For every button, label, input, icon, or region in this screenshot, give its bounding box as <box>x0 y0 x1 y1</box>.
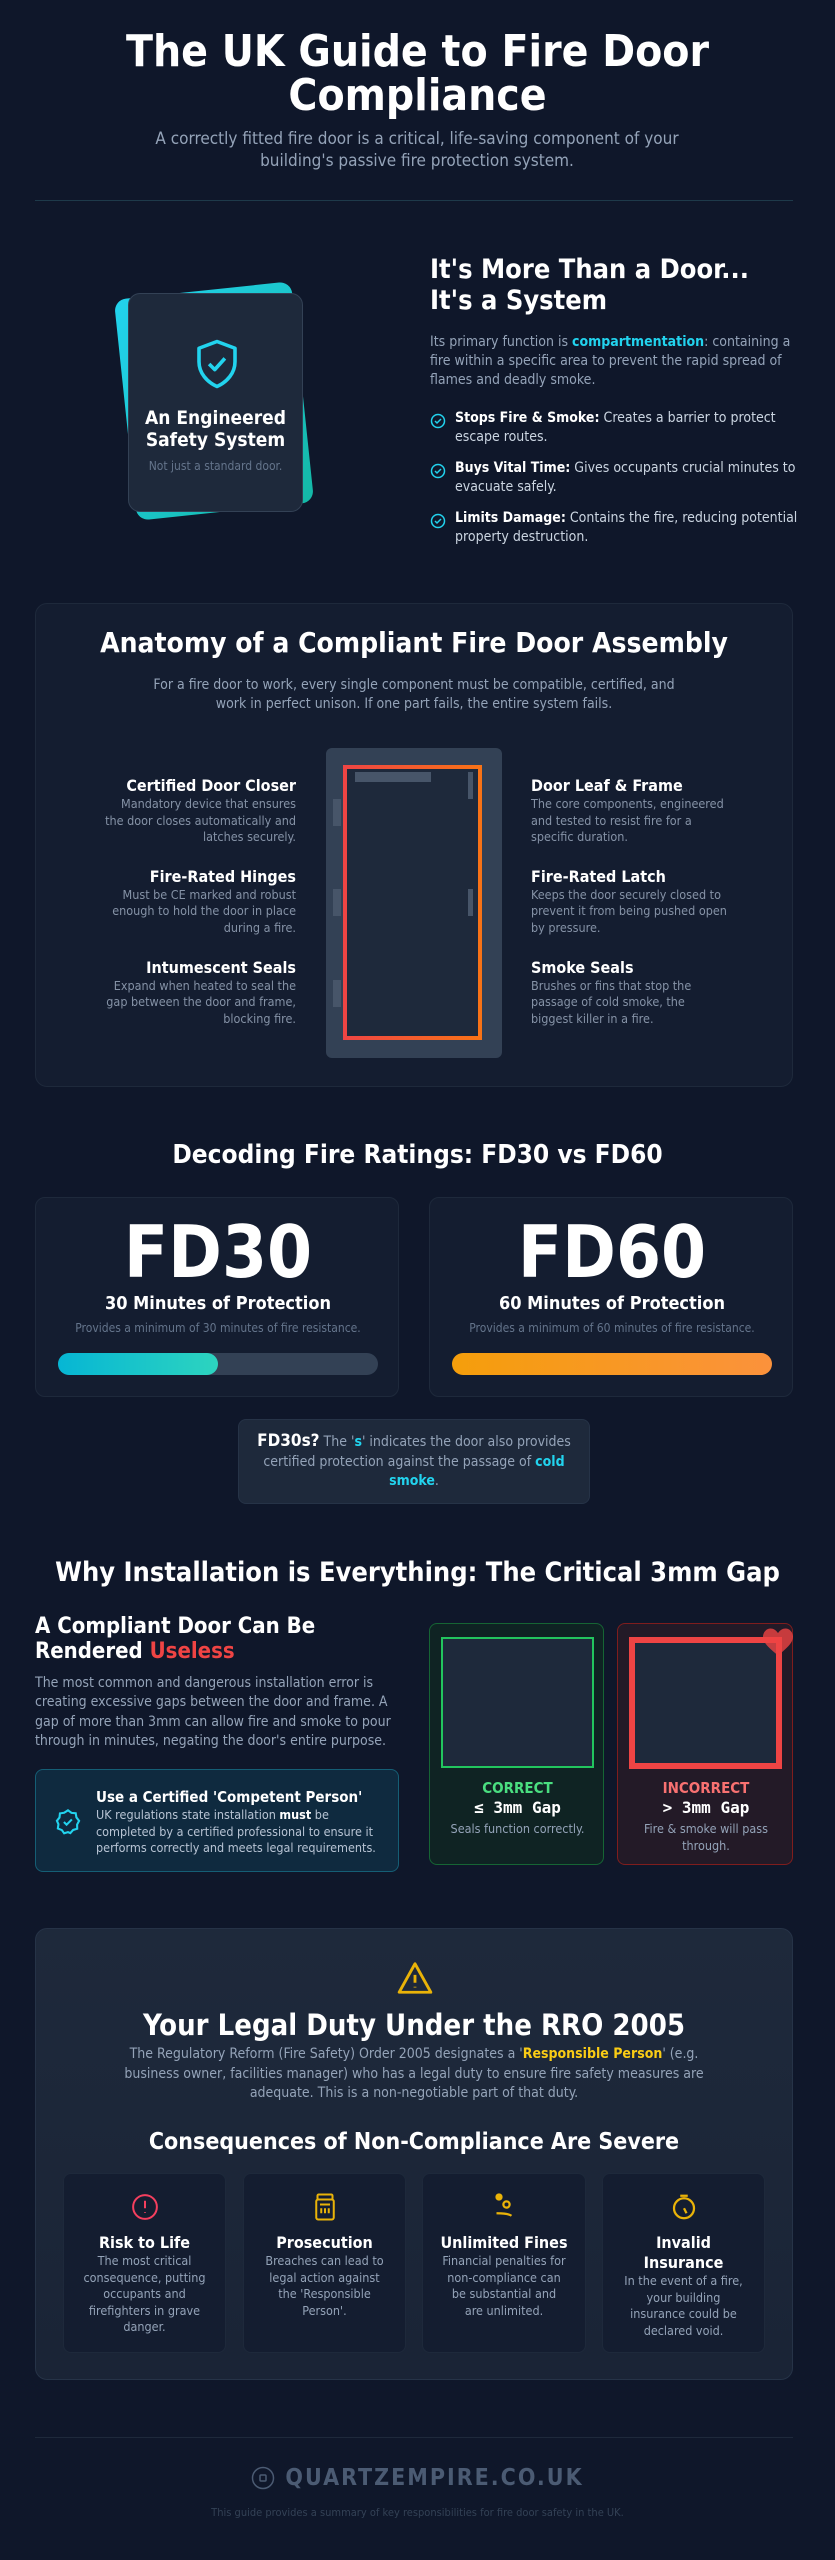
panel: incorrect gap <box>617 1623 793 1865</box>
callout: competent person: UK regulations state installation must be completed by a certified professional to ensure it performs correctly and meets legal requirements. <box>96 1807 376 1855</box>
icon: badge check <box>56 1809 80 1834</box>
labels: left components: Must be CE marked and robust enough to hold the door in place during a fire. <box>112 887 296 935</box>
text block: more than a door: Its primary function is compartmentation: containing a fire within a specific area to prevent the rapid spread of flames and deadly smoke. <box>430 334 790 388</box>
card: prosecution: Prosecution <box>276 2233 373 2252</box>
icon: shield <box>197 340 237 388</box>
footer: note: This guide provides a summary of key responsibilities for fire door safety in the UK. <box>211 2506 624 2519</box>
title <box>126 26 709 121</box>
panel: FD30: FD30 <box>124 1210 312 1294</box>
panel: system card illustration: Not just a standard door. <box>149 459 282 473</box>
bullet list: Buys Vital Time: Gives occupants crucial minutes to evacuate safely. <box>455 460 795 495</box>
callout: FD30s: FD30s? The 's' indicates the door also provides certified protection against the passage of cold smoke. <box>257 1431 571 1489</box>
heading: anatomy: Anatomy of a Compliant Fire Door Assembly <box>100 626 728 659</box>
card: fines: Unlimited Fines <box>440 2233 568 2252</box>
bullet list: Stops Fire & Smoke: Creates a barrier to protect escape routes. <box>455 410 776 445</box>
text block: useless: A Compliant Door Can Be <box>35 1614 315 1639</box>
footer: logo: QUARTZEMPIRE.CO.UK <box>285 2465 584 2491</box>
labels: left components: Mandatory device that ensures the door closes automatically and latches securely. <box>105 796 296 844</box>
panel: correct gap: ≤ 3mm Gap <box>474 1798 561 1817</box>
bullet list: Limits Damage: Contains the fire, reducing potential property destruction. <box>455 510 797 545</box>
card: risk to life: The most critical consequence, putting occupants and firefighters in grave danger. <box>83 2253 206 2334</box>
panel: correct gap <box>429 1623 604 1865</box>
labels: right components: Fire-Rated Latch <box>531 867 666 886</box>
labels: left components <box>105 776 296 1026</box>
card: fines: Financial penalties for non-compliance can be substantial and are unlimited. <box>442 2253 566 2318</box>
panel: anatomy: For a fire door to work, every single component must be compatible, certified, and work in perfect unison. If one part fails, the entire system fails. <box>153 677 675 712</box>
card: insurance: Invalid <box>656 2233 711 2252</box>
title: Compliance <box>288 70 547 121</box>
card: insurance: In the event of a fire, your building insurance could be declared void. <box>624 2273 743 2338</box>
panel: FD60 <box>429 1197 793 1397</box>
labels: right components: The core components, engineered and tested to resist fire for a specific duration. <box>531 796 724 844</box>
panel: FD30: Provides a minimum of 30 minutes of fire resistance. <box>75 1321 361 1335</box>
panel: FD60: 60 Minutes of Protection <box>499 1293 725 1314</box>
panel: FD60: Provides a minimum of 60 minutes of fire resistance. <box>469 1321 755 1335</box>
heading: engineered safety system <box>145 407 286 451</box>
labels: left components: Expand when heated to seal the gap between the door and frame, blocking fire. <box>106 978 296 1026</box>
panel: legal duty: The Regulatory Reform (Fire Safety) Order 2005 designates a 'Responsible Person' (e.g. business owner, facilities manager) who has a legal duty to ensure fire safety measures are adequate. This is a non-negotiable part of that duty. <box>124 2046 704 2101</box>
callout: FD30s <box>238 1419 590 1504</box>
labels: right components <box>531 776 727 1026</box>
card: risk to life <box>63 2173 226 2353</box>
text block: useless: The most common and dangerous installation error is creating excessive gaps between the door and frame. A gap of more than 3mm can allow fire and smoke to pour through in minutes, negating the door's entire purpose. <box>35 1675 391 1749</box>
heading: consequences: Consequences of Non-Compliance Are Severe <box>149 2129 679 2155</box>
heading: engineered safety system: An Engineered <box>145 407 286 429</box>
card: insurance <box>602 2173 765 2353</box>
text block: more than a door: It's a System <box>430 285 607 316</box>
icon: warning <box>398 1962 432 1994</box>
card: insurance: Insurance <box>644 2253 723 2272</box>
panel: legal duty <box>35 1928 793 2380</box>
labels: right components: Keeps the door securely closed to prevent it from being pushed open by pressure. <box>531 887 727 935</box>
labels: left components: Fire-Rated Hinges <box>150 867 296 886</box>
labels: right components: Smoke Seals <box>531 958 634 977</box>
panel: FD30 <box>35 1197 399 1397</box>
heading: fire ratings: Decoding Fire Ratings: FD30 vs FD60 <box>172 1140 663 1170</box>
callout: competent person: Use a Certified 'Competent Person' <box>96 1788 362 1806</box>
text block: useless <box>34 1614 391 1749</box>
heading: engineered safety system: Safety System <box>146 429 285 451</box>
panel: correct gap: Seals function correctly. <box>451 1821 584 1836</box>
panel: FD60: FD60 <box>518 1210 706 1294</box>
title: The UK Guide to Fire Door <box>126 26 709 77</box>
panel: FD30: 30 Minutes of Protection <box>105 1293 331 1314</box>
card: fines <box>422 2173 586 2353</box>
card: prosecution: Breaches can lead to legal action against the 'Responsible Person'. <box>265 2253 384 2318</box>
panel: incorrect gap: Fire & smoke will pass through. <box>644 1821 768 1852</box>
labels: left components: Intumescent Seals <box>146 958 296 977</box>
panel: incorrect gap: > 3mm Gap <box>663 1798 749 1817</box>
labels: right components: Door Leaf & Frame <box>531 776 683 795</box>
card: prosecution <box>243 2173 406 2353</box>
text block: useless: Rendered Useless <box>35 1639 235 1664</box>
panel: anatomy <box>35 603 793 1087</box>
panel: system card illustration <box>115 282 313 520</box>
bar chart: 60 min <box>452 1353 772 1375</box>
bar chart: 30 min <box>58 1353 378 1375</box>
heading: legal duty: Your Legal Duty Under the RRO 2005 <box>143 2008 685 2042</box>
subtitle: A correctly fitted fire door is a critical, life-saving component of your building's passive fire protection system. <box>155 129 679 171</box>
door diagram <box>326 748 502 1058</box>
card: risk to life: Risk to Life <box>99 2233 190 2252</box>
panel: incorrect gap: INCORRECT <box>663 1779 749 1797</box>
labels: right components: Brushes or fins that stop the passage of cold smoke, the biggest killer in a fire. <box>531 978 691 1026</box>
text block: more than a door: It's More Than a Door... <box>430 254 749 285</box>
labels: left components: Certified Door Closer <box>126 776 296 795</box>
bullet list <box>430 410 797 545</box>
text block: more than a door <box>430 254 790 388</box>
callout: competent person <box>35 1769 399 1872</box>
heading: installation: Why Installation is Everything: The Critical 3mm Gap <box>55 1557 780 1588</box>
icon: heat <box>763 1628 793 1654</box>
panel: correct gap: CORRECT <box>482 1779 553 1797</box>
